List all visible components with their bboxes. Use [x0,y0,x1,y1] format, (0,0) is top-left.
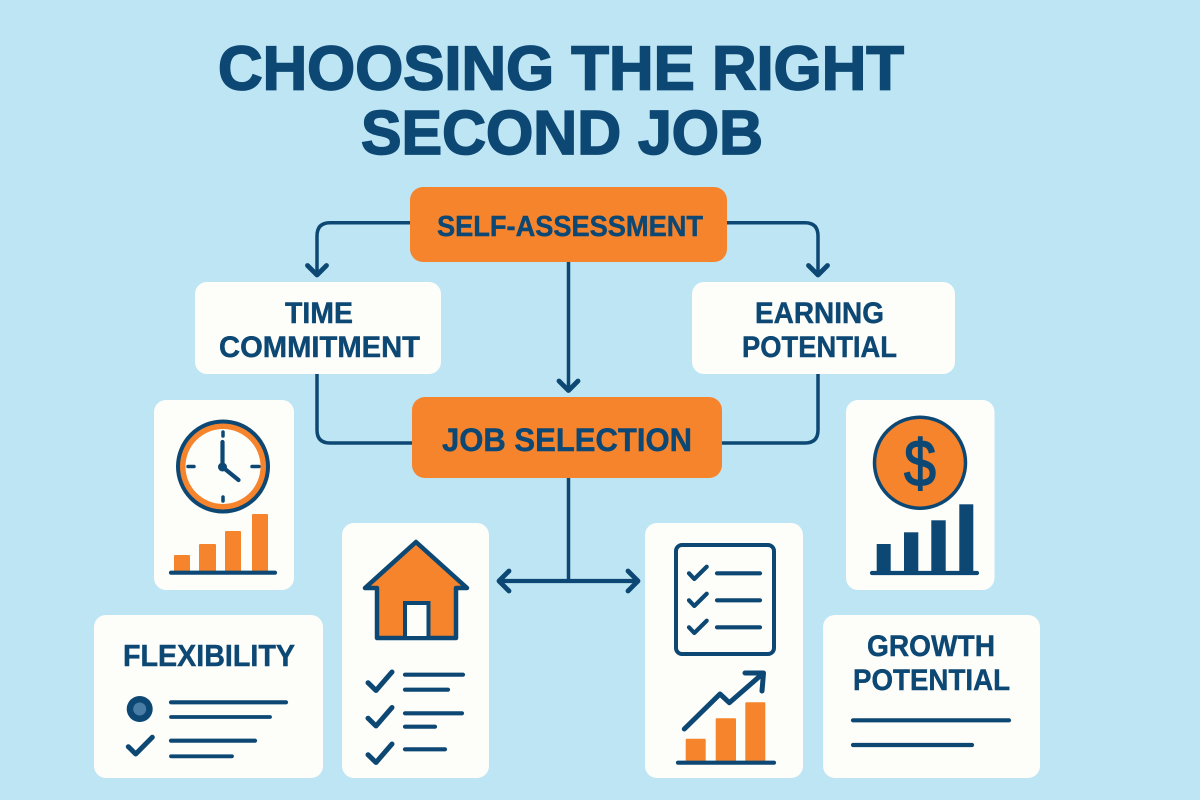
panel: clock card [154,400,294,590]
panel: self-assessment: SELF-ASSESSMENT [437,211,703,243]
panel: time commitment [195,282,441,374]
icon: dollar coin: $ [904,426,936,500]
icon: radio dot [127,696,153,722]
panel: self-assessment [410,187,727,262]
icon: clock [178,422,268,512]
connector: earning potential to job selection [722,374,818,443]
title: SECOND JOB [361,99,763,168]
text lines [853,720,1009,745]
panel: job selection [412,397,722,478]
panel: job selection: JOB SELECTION [442,422,692,458]
title: CHOOSING THE RIGHT [218,34,904,104]
panel: flexibility: FLEXIBILITY [123,638,295,673]
arrow: self-assessment to time commitment [308,223,410,275]
panel: home card [342,523,489,778]
panel: earning potential [692,282,955,374]
panel: growth potential [823,615,1040,778]
panel: earning potential: EARNING [755,297,884,330]
panel: flexibility [94,615,323,778]
connector: time commitment to job selection [317,374,412,443]
icon: check mark [128,737,152,754]
arrow: self-assessment to job selection [559,262,578,390]
panel: time commitment: TIME [285,297,353,330]
panel: time commitment: COMMITMENT [219,331,420,364]
icon: house [365,542,467,638]
text lines [171,702,286,756]
icon: checklist [676,545,774,654]
chart: rising bars with trend arrow [678,673,774,763]
panel: earning potential: POTENTIAL [742,331,897,364]
panel: checklist and growth card [645,523,803,778]
checklist: three checks with lines [368,672,463,762]
arrow: self-assessment to earning potential [727,223,828,275]
panel: growth potential: GROWTH [867,630,995,663]
panel: dollar card [846,400,994,590]
arrow: job selection to both lower cards [499,478,638,591]
panel: growth potential: POTENTIAL [853,664,1010,697]
title [218,34,904,168]
bar chart: rising orange bars [171,514,275,573]
bar chart: rising navy bars [872,504,977,573]
icon: dollar coin [874,417,966,508]
